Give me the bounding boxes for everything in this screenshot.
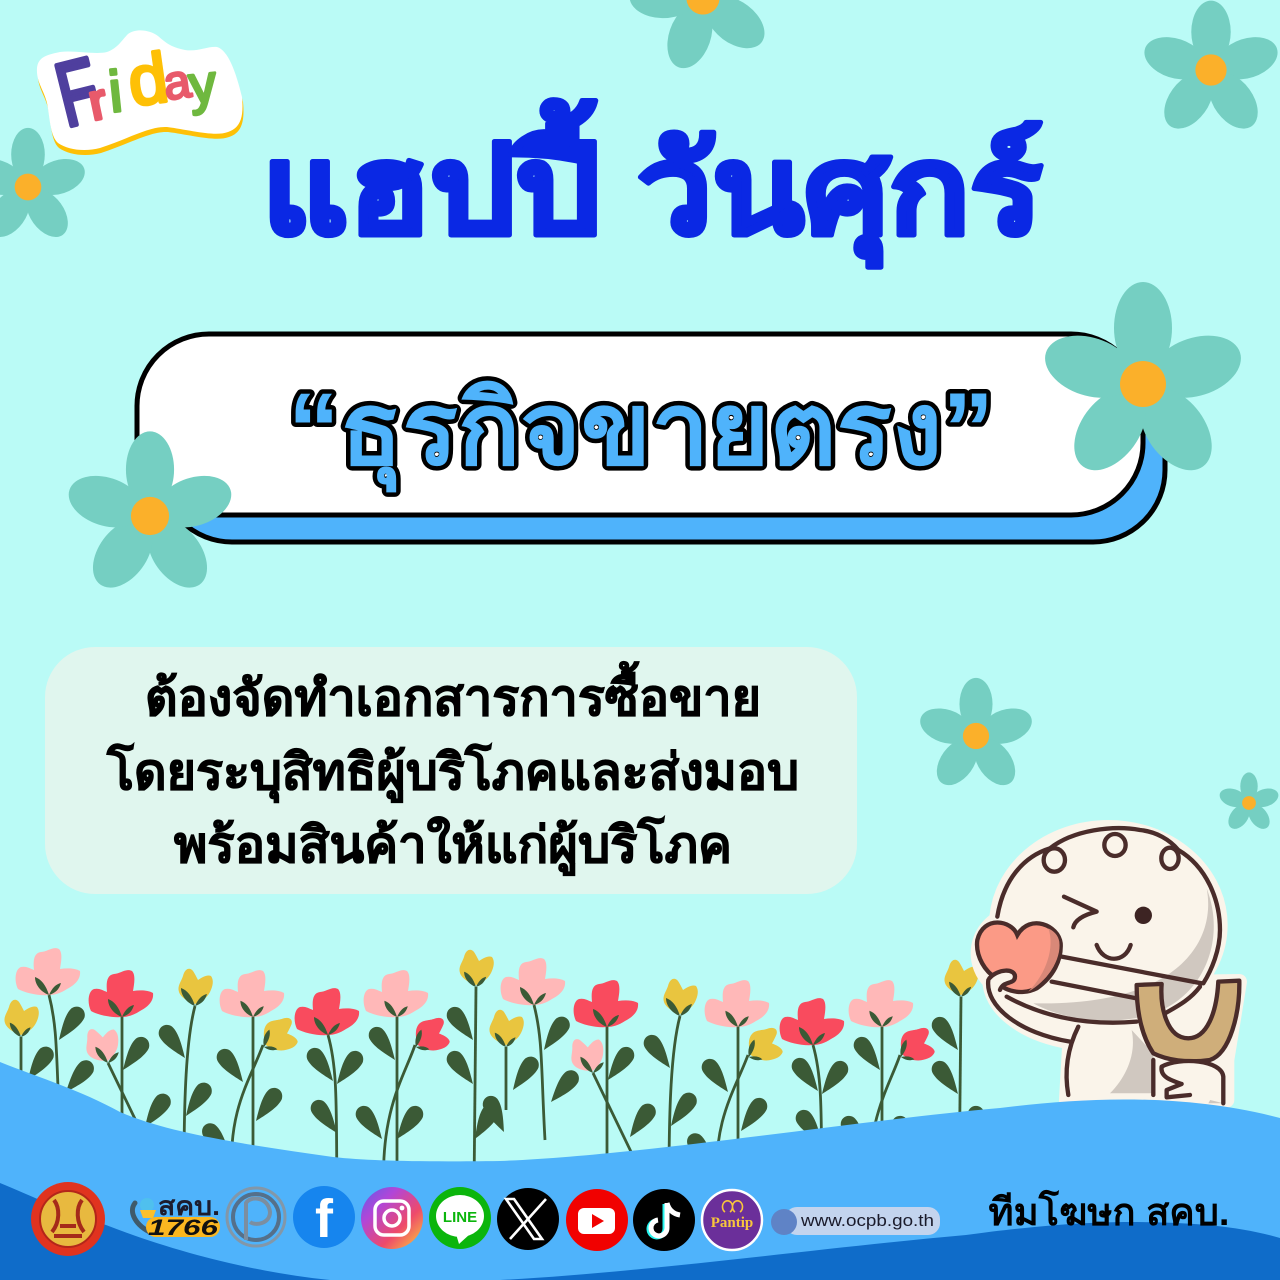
text: message lines bbox=[106, 661, 799, 876]
wave: dark blue left bbox=[0, 1183, 330, 1280]
panel: message bbox=[45, 647, 857, 894]
text: message lines: โดยระบุสิทธิผู้บริโภคและส่งมอบ bbox=[106, 742, 799, 803]
website link: www.ocpb.go.th bbox=[800, 1212, 934, 1230]
icon: flower top center bbox=[609, 0, 797, 89]
icon: flower left bbox=[0, 128, 89, 245]
title: แฮปปี้ วันศุกร์ bbox=[262, 99, 1042, 268]
badge: Friday: r bbox=[84, 73, 112, 131]
badge: Friday: i bbox=[106, 59, 125, 125]
mascot: character with heart and slingshot bbox=[977, 828, 1239, 1103]
badge: Friday: F bbox=[46, 38, 109, 146]
icon: hotline 1766: สคบ. bbox=[158, 1191, 220, 1221]
website link bbox=[771, 1207, 940, 1235]
icon: flower medium right bbox=[916, 678, 1036, 793]
heading: direct selling business: “ธุรกิจขายตรง” bbox=[288, 372, 994, 493]
badge: Friday: y bbox=[186, 53, 219, 116]
icon: flower on banner right bbox=[1037, 282, 1249, 484]
icon: X bbox=[497, 1188, 559, 1250]
icon: Instagram bbox=[361, 1187, 423, 1249]
text: message lines: พร้อมสินค้าให้แก่ผู้บริโภค bbox=[174, 815, 732, 876]
wave: light blue hill bbox=[0, 1062, 1280, 1280]
icon: hotline 1766 bbox=[132, 1191, 220, 1240]
icon: OCPB seal bbox=[31, 1182, 105, 1256]
icon: Facebook bbox=[293, 1186, 355, 1249]
text: message lines: ต้องจัดทำเอกสารการซื้อขาย bbox=[145, 661, 761, 726]
icon: flower on banner left bbox=[62, 431, 238, 599]
badge: Friday: a bbox=[160, 55, 194, 111]
icon: TikTok bbox=[633, 1189, 695, 1251]
icon: LINE bbox=[429, 1187, 491, 1249]
icon: Pantip: Pantip bbox=[711, 1215, 753, 1231]
wave: dark blue right bbox=[500, 1222, 1280, 1280]
icon: Pantip bbox=[702, 1190, 762, 1250]
icon: hotline 1766: 1766 bbox=[148, 1215, 219, 1240]
flower field bbox=[4, 948, 997, 1200]
icon: Facebook: f bbox=[315, 1189, 334, 1249]
badge: Friday bbox=[37, 30, 243, 155]
icon: flower top right bbox=[1139, 1, 1280, 138]
panel: keyword banner bbox=[137, 334, 1165, 542]
text: team credit: ทีมโฆษก สคบ. bbox=[988, 1189, 1230, 1234]
icon: CPB logo bbox=[227, 1188, 285, 1246]
icon: YouTube bbox=[566, 1189, 628, 1251]
badge: Friday: d bbox=[123, 38, 173, 121]
icon: LINE: LINE bbox=[443, 1209, 477, 1226]
icon: flower small right bbox=[1217, 772, 1280, 833]
